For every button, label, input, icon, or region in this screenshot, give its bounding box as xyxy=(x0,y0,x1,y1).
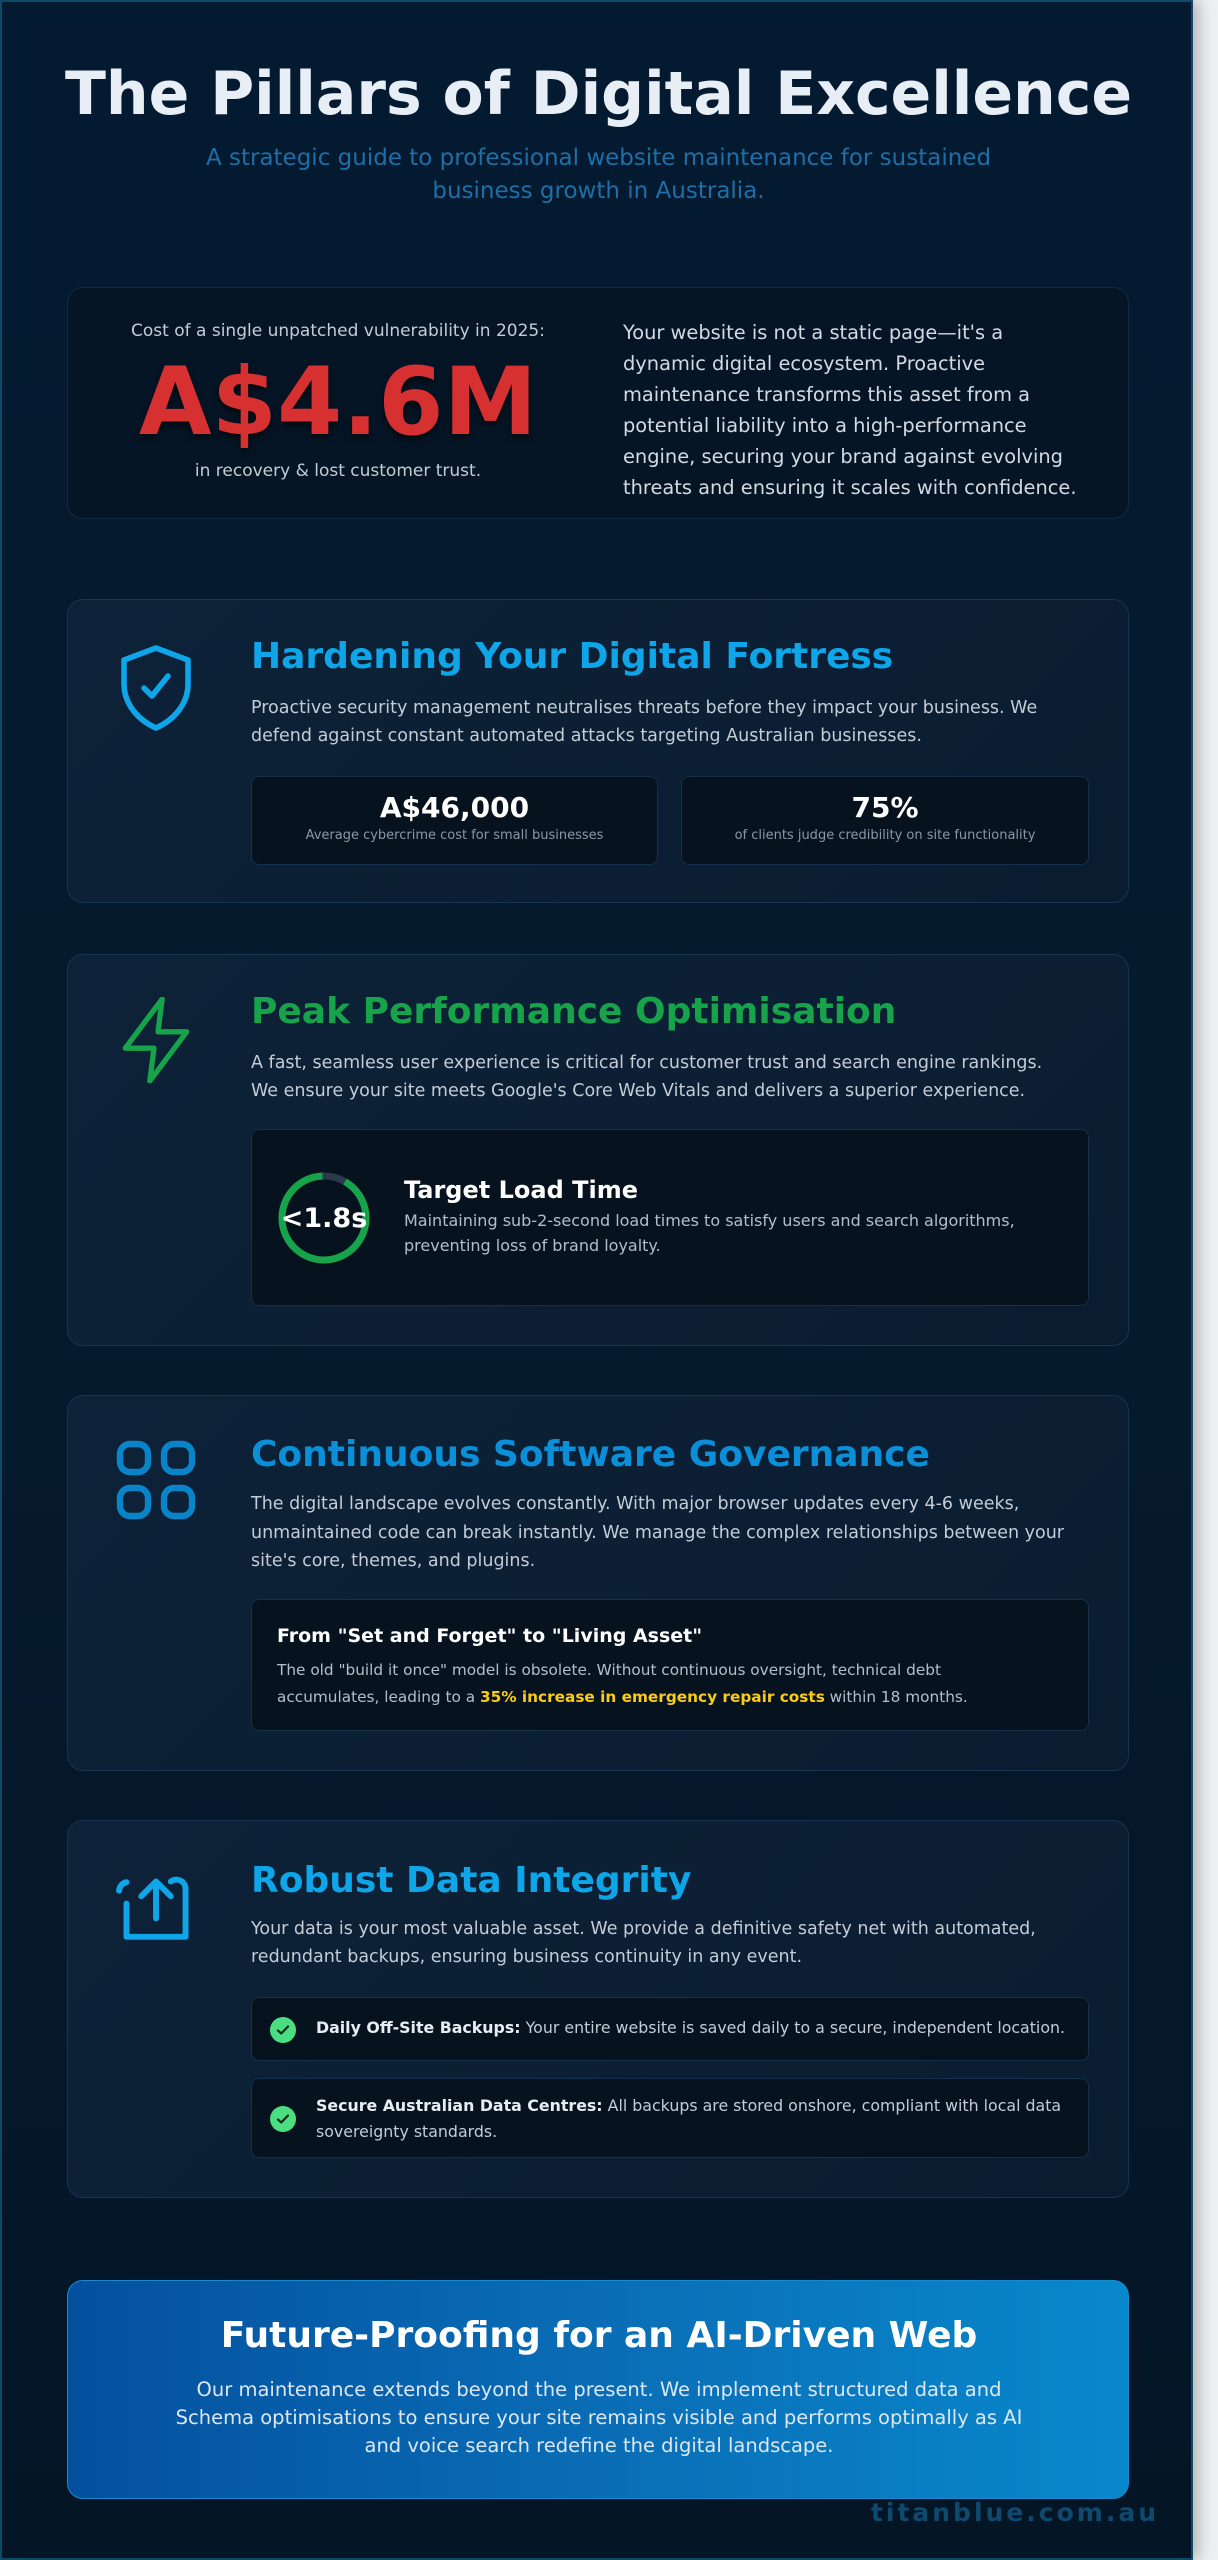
panel: hero stat xyxy=(67,287,1129,519)
text xyxy=(250,1494,1064,1571)
item: daily backups: Daily Off-Site Backups: Your entire website is saved daily to a secure, independent location. xyxy=(316,2018,1065,2037)
stat: credibility: of clients judge credibility on site functionality xyxy=(735,828,1035,843)
intro text: maintenance transforms this asset from a xyxy=(623,383,1030,406)
icon: upload xyxy=(116,1876,188,1940)
callout xyxy=(251,1599,1089,1731)
text: Your data is your most valuable asset. We provide a definitive safety net with automated, xyxy=(251,1919,1036,1939)
callout: accumulates, leading to a 35% increase in emergency repair costs within 18 months. xyxy=(277,1688,968,1706)
text: site's core, themes, and plugins. xyxy=(251,1551,535,1571)
stat: credibility xyxy=(681,776,1089,865)
subtitle xyxy=(206,145,991,204)
panel: security xyxy=(67,599,1129,903)
stat: cost xyxy=(251,776,658,865)
stat label: Cost of a single unpatched vulnerability in 2025: xyxy=(131,321,545,341)
load time box xyxy=(251,1129,1089,1306)
heading: Robust Data Integrity xyxy=(251,1860,691,1901)
text: The digital landscape evolves constantly. With major browser updates every 4-6 weeks, xyxy=(251,1494,1019,1514)
chart: ring xyxy=(278,1172,370,1264)
icon: lightning xyxy=(122,997,190,1083)
icon: shield xyxy=(121,645,191,731)
stat caption: in recovery & lost customer trust. xyxy=(195,461,481,481)
cta text xyxy=(176,2378,1022,2457)
text: defend against constant automated attacks targeting Australian businesses. xyxy=(251,726,922,746)
panel: governance xyxy=(67,1395,1129,1771)
heading: Peak Performance Optimisation xyxy=(251,991,896,1032)
text: A fast, seamless user experience is critical for customer trust and search engine rankings. xyxy=(251,1053,1042,1073)
intro text: Your website is not a static page—it's a xyxy=(623,321,1003,344)
subtitle: business growth in Australia. xyxy=(432,178,765,204)
heading: Continuous Software Governance xyxy=(251,1434,930,1475)
chart: ring: <1.8s xyxy=(281,1203,367,1234)
cta heading: Future-Proofing for an AI-Driven Web xyxy=(221,2315,977,2356)
intro text: dynamic digital ecosystem. Proactive xyxy=(623,352,985,375)
text: We ensure your site meets Google's Core Web Vitals and delivers a superior experience. xyxy=(251,1081,1025,1101)
subtitle: A strategic guide to professional website maintenance for sustained xyxy=(206,145,991,171)
intro text: potential liability into a high-performance xyxy=(623,414,1027,437)
item: australian data centres xyxy=(251,2078,1089,2158)
text xyxy=(251,698,1037,746)
stat: cost: A$46,000 xyxy=(380,791,529,824)
panel: data integrity xyxy=(67,1820,1129,2198)
intro text xyxy=(623,321,1076,499)
big number: A$4.6M xyxy=(139,348,537,457)
load text: Maintaining sub-2-second load times to satisfy users and search algorithms, preventing loss of brand loyalty. xyxy=(404,1211,1015,1255)
stat: credibility: 75% xyxy=(851,791,919,824)
cta text: and voice search redefine the digital landscape. xyxy=(364,2434,833,2457)
item: australian data centres: sovereignty standards. xyxy=(316,2122,497,2141)
intro text: threats and ensuring it scales with confidence. xyxy=(623,476,1076,499)
text xyxy=(251,1919,1036,1967)
cta text: Schema optimisations to ensure your site remains visible and performs optimally as AI xyxy=(176,2406,1022,2429)
cta text: Our maintenance extends beyond the present. We implement structured data and xyxy=(197,2378,1001,2401)
item: australian data centres: Secure Australian Data Centres: All backups are stored onshore, compliant with local data xyxy=(316,2096,1061,2115)
panel: performance xyxy=(67,954,1129,1346)
footer brand: titanblue.com.au xyxy=(871,2498,1159,2527)
stat: cost: Average cybercrime cost for small businesses xyxy=(306,828,603,843)
panel: call to action xyxy=(67,2280,1129,2499)
load title: Target Load Time xyxy=(404,1176,638,1204)
text: redundant backups, ensuring business continuity in any event. xyxy=(251,1947,802,1967)
item: daily backups xyxy=(251,1997,1089,2061)
text: unmaintained code can break instantly. We manage the complex relationships between your xyxy=(251,1522,1064,1542)
text: Proactive security management neutralises threats before they impact your business. We xyxy=(251,698,1037,718)
title: The Pillars of Digital Excellence xyxy=(65,59,1132,129)
icon: grid xyxy=(116,1440,196,1520)
heading: Hardening Your Digital Fortress xyxy=(251,636,893,677)
text xyxy=(251,1053,1042,1101)
intro text: engine, securing your brand against evolving xyxy=(623,445,1063,468)
callout: The old "build it once" model is obsolete. Without continuous oversight, technical debt xyxy=(277,1661,941,1679)
callout: From "Set and Forget" to "Living Asset" xyxy=(277,1625,702,1647)
